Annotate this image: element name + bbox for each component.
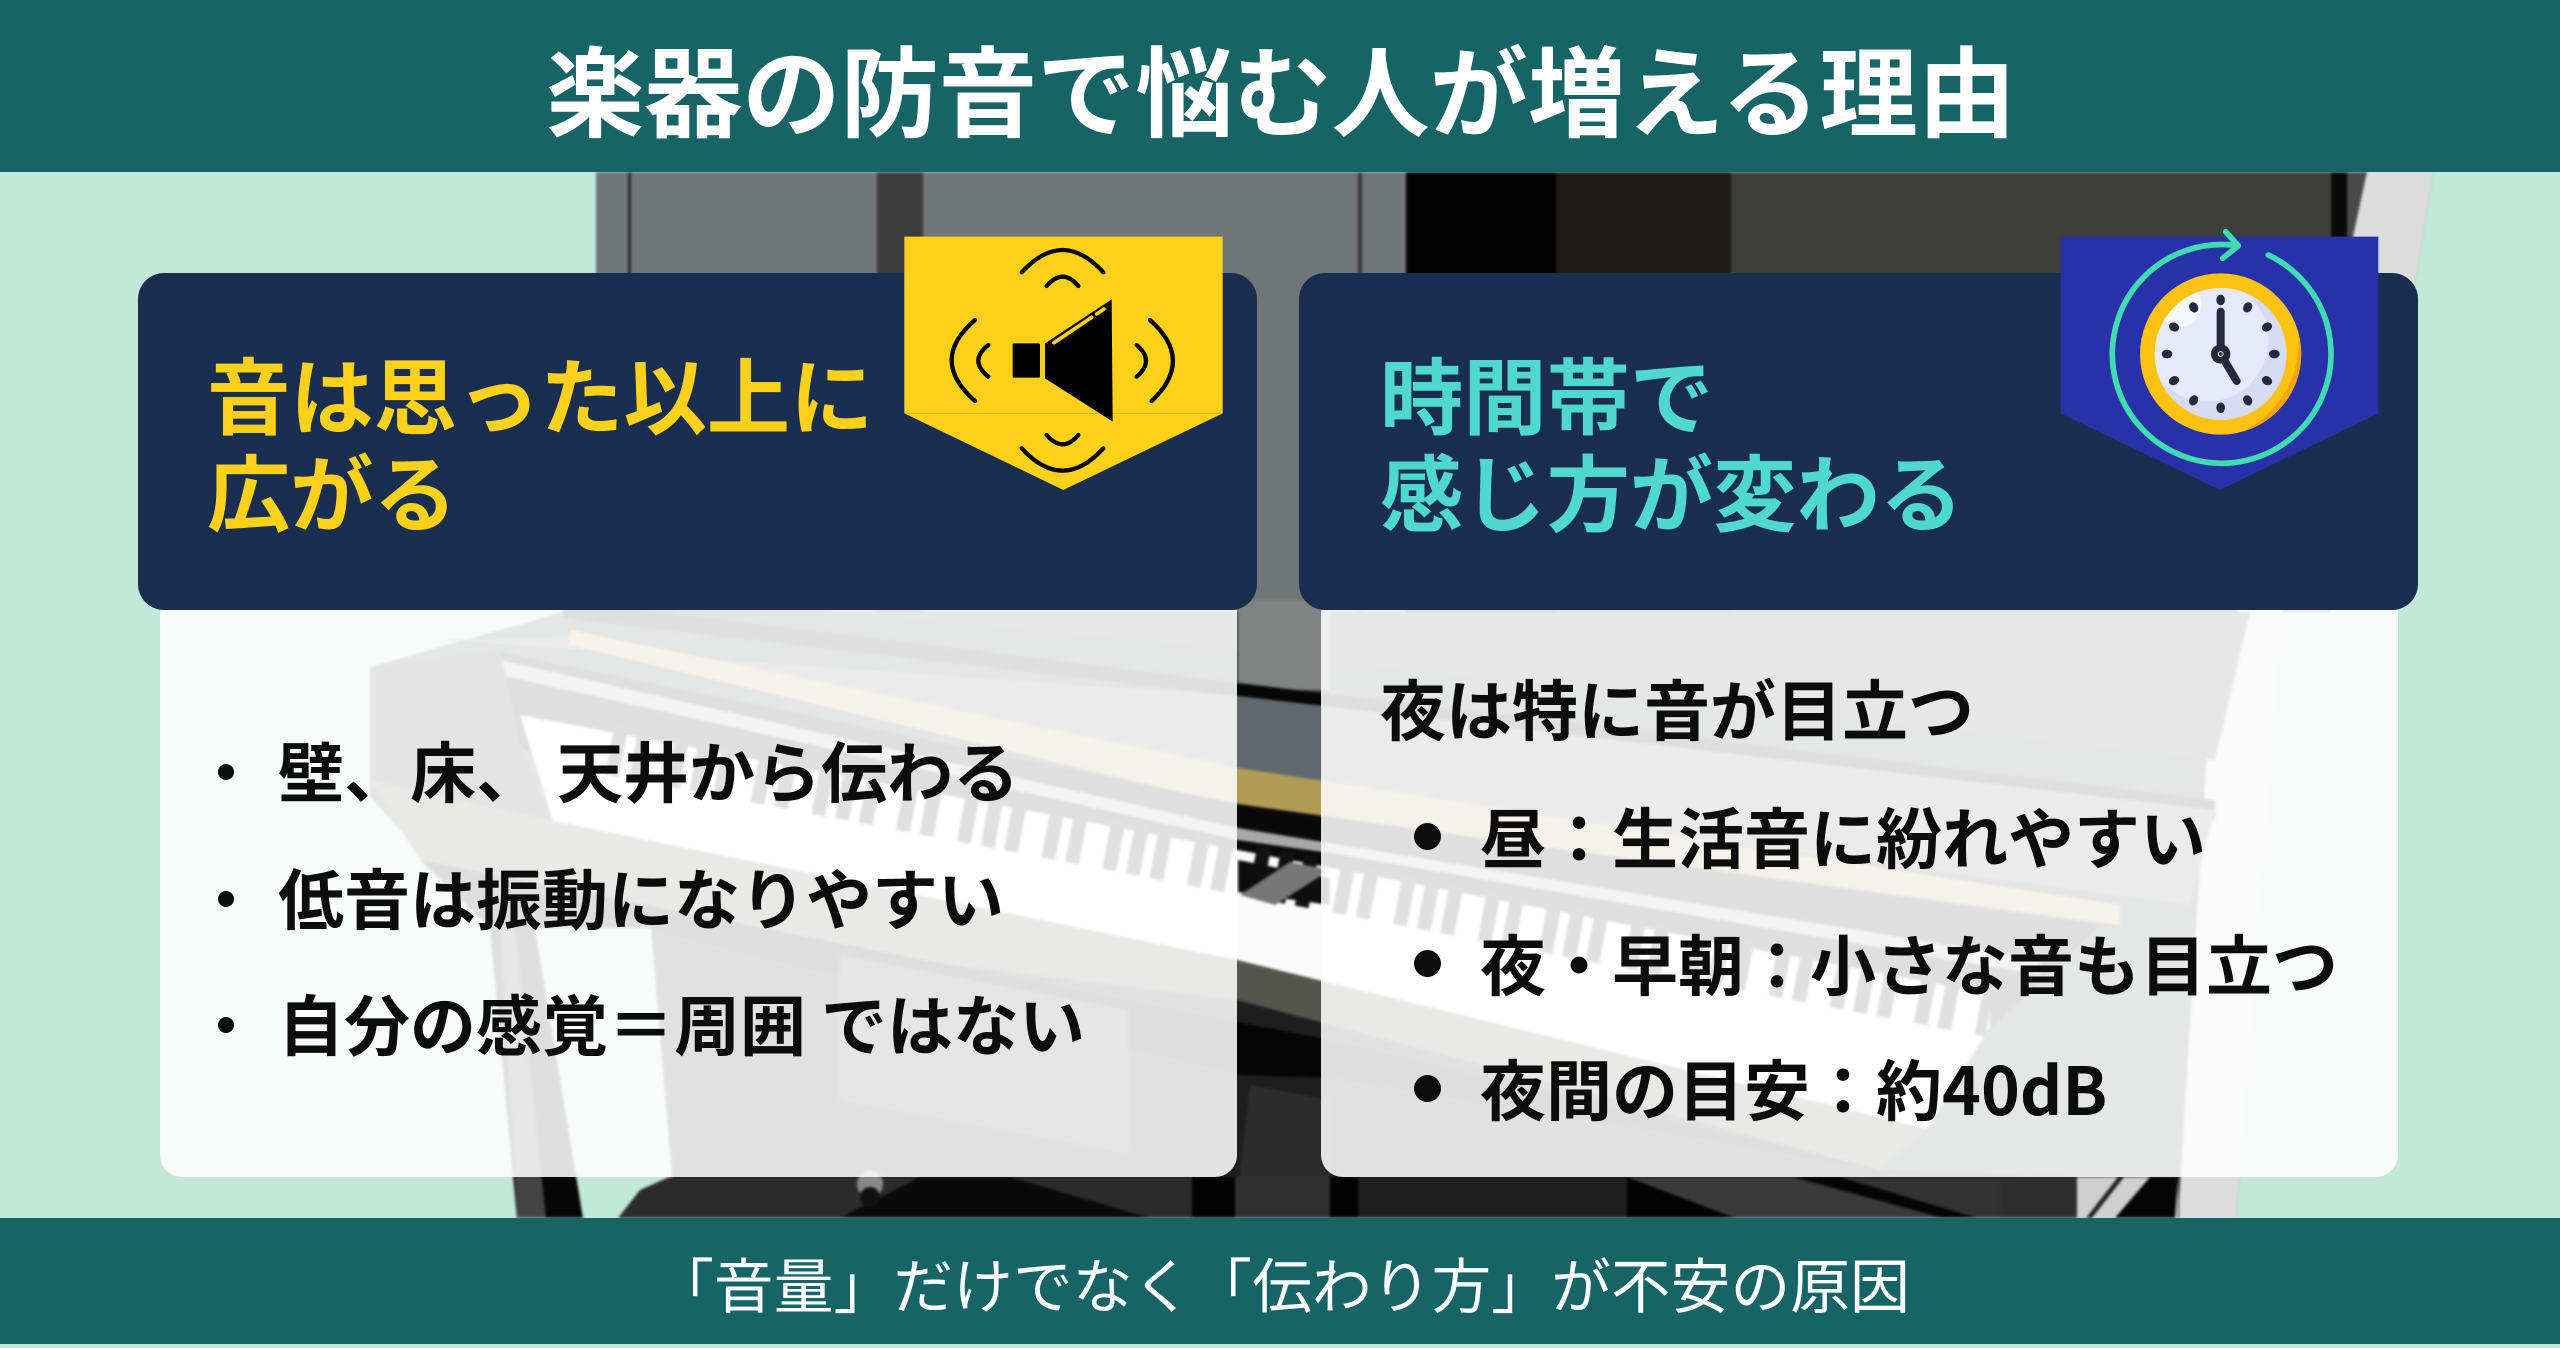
panel body card <box>160 610 1237 1177</box>
panel: time of day <box>1299 228 2418 1177</box>
panel header background <box>138 273 1257 610</box>
body lead text: 夜は特に音が目立つ <box>1380 659 1974 755</box>
icon: speaker badge <box>904 236 1223 490</box>
bullet list <box>1414 787 2338 1135</box>
panel heading: 時間帯で <box>1380 331 1713 452</box>
panel heading: 広がる <box>207 428 457 549</box>
footer band <box>0 1218 2560 1344</box>
bullet 3: 自分の感覚＝周囲 ではない <box>278 974 1085 1070</box>
title: 楽器の防音で悩む人が増える理由 <box>546 16 2016 158</box>
panel heading: 音は思った以上に <box>207 331 873 452</box>
footer message: 「音量」だけでなく「伝わり方」が不安の原因 <box>654 1240 1910 1326</box>
panel heading <box>1380 331 1963 549</box>
panel heading: 感じ方が変わる <box>1380 428 1963 549</box>
panel heading <box>207 331 873 549</box>
bullet list <box>218 721 1085 1070</box>
panel body card <box>1321 610 2398 1177</box>
bullet 1: 昼：生活音に紛れやすい <box>1480 787 2206 883</box>
panel header background <box>1299 273 2418 610</box>
header band <box>0 0 2560 172</box>
icon: clock badge <box>2060 228 2378 490</box>
panel: sound spreads <box>138 236 1257 1177</box>
bullet 2: 低音は振動になりやすい <box>278 848 1004 944</box>
bullet 3: 夜間の目安：約40dB <box>1480 1039 2107 1135</box>
bullet 2: 夜・早朝：小さな音も目立つ <box>1480 914 2338 1010</box>
bullet 1: 壁、床、 天井から伝わる <box>278 721 1019 817</box>
